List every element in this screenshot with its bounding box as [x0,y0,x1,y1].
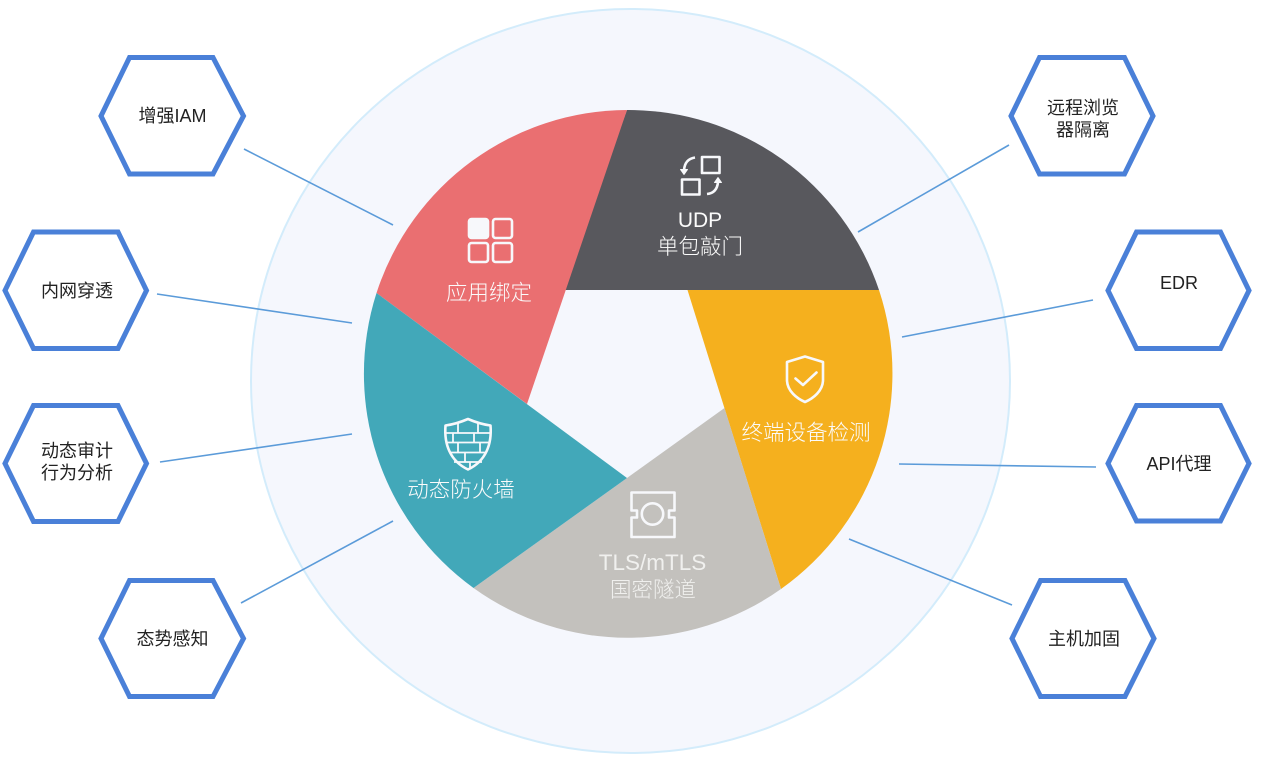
segment: 应用绑定 [376,110,627,404]
label: 动态防火墙 [407,478,515,502]
hexagon: 远程浏览器隔离: 远程浏览 [1047,98,1119,118]
label: 应用绑定 [446,281,532,305]
hexagon: EDR [1108,232,1249,348]
hexagon: 内网穿透 [5,232,146,348]
hexagon: 态势感知: 态势感知 [136,629,208,649]
label: 终端设备检测 [741,421,871,445]
hexagon: 主机加固 [1012,580,1154,696]
hexagon: API代理: API代理 [1146,454,1212,474]
hexagon: 动态审计 行为分析: 行为分析 [41,463,113,483]
icon: firewall shield [445,419,491,470]
icon: app grid [469,219,512,262]
hexagon: 远程浏览器隔离 [1011,58,1153,174]
hexagon: 主机加固: 主机加固 [1048,629,1120,649]
hexagon: 增强IAM [101,58,244,174]
hexagon: 远程浏览器隔离: 器隔离 [1056,120,1110,140]
hexagon: 动态审计 行为分析: 动态审计 [41,441,113,461]
hexagon: EDR: EDR [1160,273,1198,293]
label line 2: 单包敲门 [657,235,743,259]
hexagon: 内网穿透: 内网穿透 [41,281,113,301]
segment: TLS/mTLS 国密隧道 [474,408,781,638]
label: TLS/mTLS [599,550,706,575]
background circle [251,9,1010,753]
connector lines [157,145,1096,605]
segment: 动态防火墙 [364,293,627,588]
segment: 终端设备检测 [688,290,892,589]
label: UDP [678,209,722,232]
hexagon: 增强IAM: 增强IAM [138,106,207,126]
hexagon: 动态审计 行为分析 [5,406,146,522]
hexagon: 态势感知 [101,580,244,696]
icon: shield check [787,356,823,402]
hexagon: API代理 [1108,406,1249,521]
label line 2: 国密隧道 [610,578,696,602]
icon: tunnel chip [632,492,674,537]
segment: UDP 单包敲门 [560,110,879,290]
icon: exchange squares [680,157,722,194]
